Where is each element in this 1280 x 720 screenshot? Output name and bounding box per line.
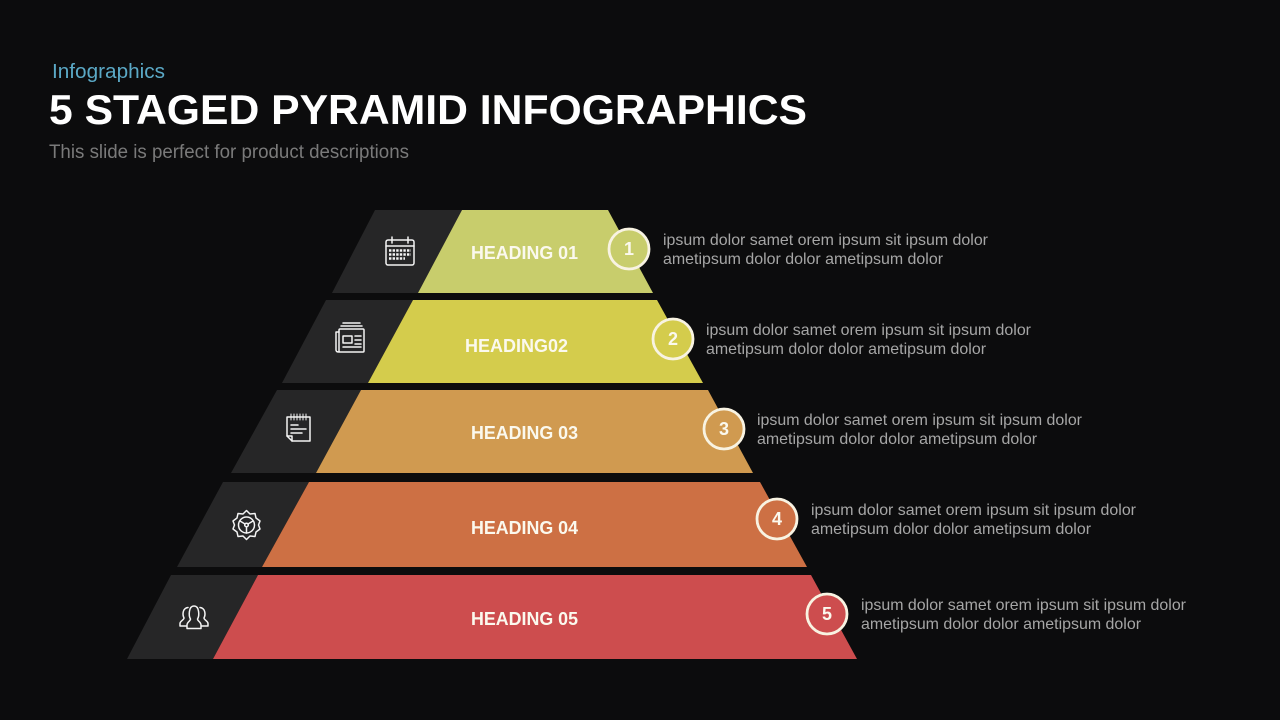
description 4: ipsum dolor samet orem ipsum sit ipsum dolor (811, 502, 1137, 519)
pyramid stage 1 (332, 210, 989, 293)
heading 3: HEADING 03 (471, 423, 578, 443)
number badge 2: 2 (668, 329, 678, 349)
description 1: ametipsum dolor dolor ametipsum dolor (663, 251, 944, 268)
subtitle: This slide is perfect for product descriptions (49, 142, 409, 163)
heading 2: HEADING02 (465, 336, 568, 356)
number badge 2 (653, 319, 693, 359)
colour band 5 (213, 575, 857, 659)
pyramid stage 4 (177, 482, 1137, 567)
dark icon panel 2 (282, 300, 413, 383)
description 5: ametipsum dolor dolor ametipsum dolor (861, 616, 1142, 633)
dark icon panel 3 (231, 390, 361, 473)
colour band 3 (316, 390, 753, 473)
description 3 (757, 412, 1083, 448)
title: 5 STAGED PYRAMID INFOGRAPHICS (49, 86, 807, 133)
description 4: ametipsum dolor dolor ametipsum dolor (811, 521, 1092, 538)
heading 4: HEADING 04 (471, 518, 578, 538)
number badge 3 (704, 409, 744, 449)
icon: notepad (287, 414, 310, 441)
description 2: ametipsum dolor dolor ametipsum dolor (706, 341, 987, 358)
description 2: ipsum dolor samet orem ipsum sit ipsum dolor (706, 322, 1032, 339)
description 3: ipsum dolor samet orem ipsum sit ipsum dolor (757, 412, 1083, 429)
heading 1: HEADING 01 (471, 243, 578, 263)
number badge 4 (757, 499, 797, 539)
icon: gear with wheel (233, 510, 260, 540)
icon: newspaper (336, 323, 364, 352)
pyramid stage 3 (231, 390, 1083, 473)
dark icon panel 4 (177, 482, 309, 567)
number badge 1 (609, 229, 649, 269)
icon: group of people (180, 606, 208, 628)
pyramid stage 2 (282, 300, 1032, 383)
description 1 (663, 232, 989, 268)
icon: calendar (386, 237, 414, 265)
description 1: ipsum dolor samet orem ipsum sit ipsum dolor (663, 232, 989, 249)
number badge 1: 1 (624, 239, 634, 259)
dark icon panel 1 (332, 210, 462, 293)
description 5 (861, 597, 1187, 633)
number badge 5 (807, 594, 847, 634)
heading 5: HEADING 05 (471, 609, 578, 629)
colour band 4 (262, 482, 807, 567)
colour band 1 (418, 210, 653, 293)
number badge 5: 5 (822, 604, 832, 624)
description 5: ipsum dolor samet orem ipsum sit ipsum dolor (861, 597, 1187, 614)
description 4 (811, 502, 1137, 538)
number badge 3: 3 (719, 419, 729, 439)
description 2 (706, 322, 1032, 358)
pyramid stage 5 (127, 575, 1187, 659)
dark icon panel 5 (127, 575, 258, 659)
colour band 2 (368, 300, 703, 383)
number badge 4: 4 (772, 509, 782, 529)
eyebrow label: Infographics (52, 61, 165, 83)
description 3: ametipsum dolor dolor ametipsum dolor (757, 431, 1038, 448)
